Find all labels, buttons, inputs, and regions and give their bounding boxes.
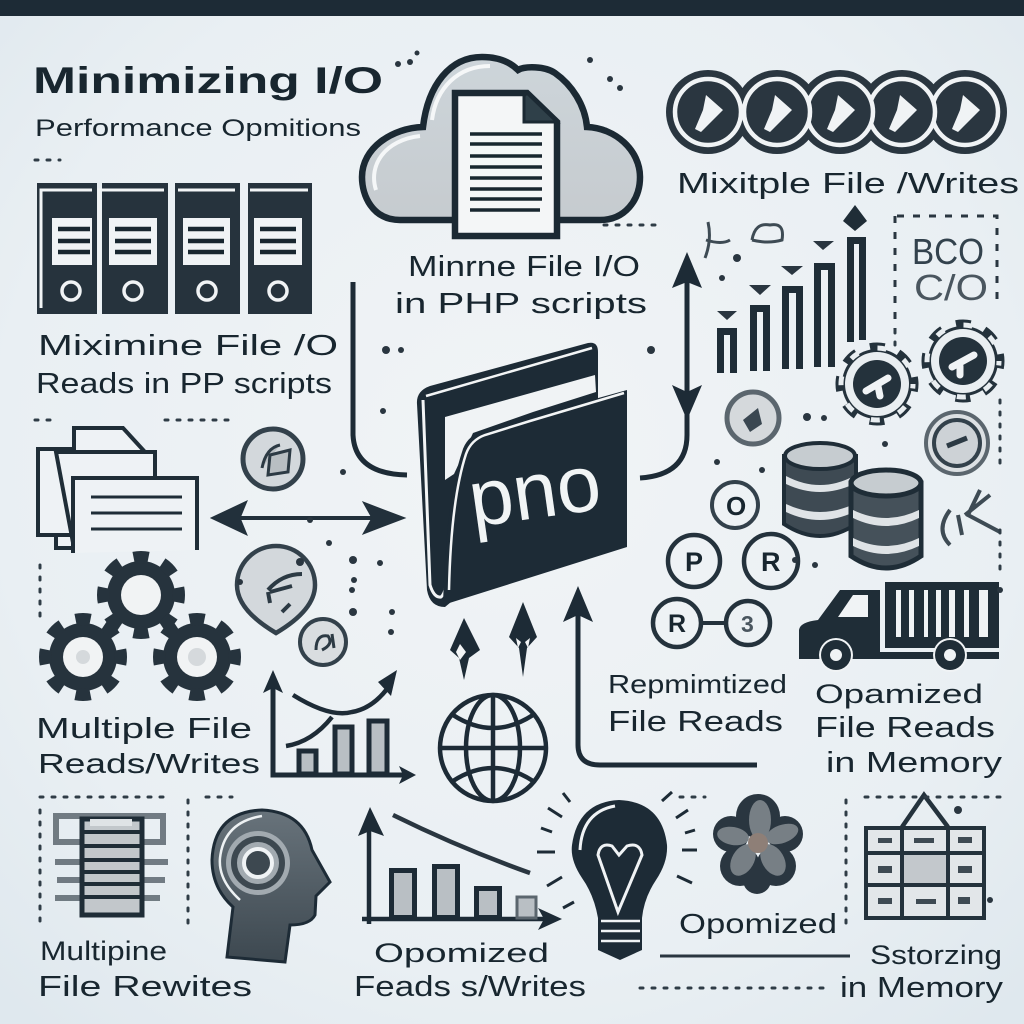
label: minimize file io <box>395 251 647 320</box>
diagram: P R nodes <box>653 534 798 647</box>
label: multiple file reads writes: Multiple File <box>36 713 252 745</box>
label: repmitized file reads: File Reads <box>608 706 783 738</box>
label: multiple file reads writes <box>36 713 260 779</box>
label: optimized reads writes: Opomized <box>374 938 549 968</box>
chart: descending bars <box>358 807 562 930</box>
label: multiple file writes: Mixitple File /Writes <box>677 168 1019 200</box>
icon: squiggle badge <box>942 490 1000 545</box>
chart: mini bars with trend <box>263 670 416 784</box>
icon: small round badge top <box>243 429 303 489</box>
icon: globe <box>440 695 546 801</box>
icon: cloud with document <box>362 57 640 236</box>
icon: flower badge <box>713 794 803 894</box>
icon: database cylinders <box>784 443 921 568</box>
label: reads in php scripts: Miximine File /O <box>38 330 338 362</box>
icon: head with target <box>212 810 330 962</box>
icon: memory grid <box>866 795 984 918</box>
icon: row of play circles <box>666 70 1007 154</box>
text: code fragment <box>895 216 997 330</box>
label: multipine file rewrites <box>38 936 252 1003</box>
icon: small badges right <box>712 392 988 528</box>
text: code fragment: C/O <box>914 267 988 308</box>
label: optimized reads writes <box>354 938 586 1003</box>
label: optimized file reads in memory: Opamized <box>815 679 983 709</box>
label: repmitized file reads: Repmimtized <box>608 669 787 699</box>
label: repmitized file reads <box>608 669 787 738</box>
diagram: P R nodes: R <box>761 547 780 577</box>
icon: light bulb <box>537 792 697 960</box>
label: reads in php scripts: Reads in PP scripts <box>36 368 332 400</box>
label: optimized: Opomized <box>679 908 837 939</box>
diagram: P R nodes: P <box>685 547 703 577</box>
icon: folder PHP <box>417 343 627 607</box>
arrow: vertical double <box>640 252 702 478</box>
label: minimize file io: Minrne File I/O <box>408 251 640 283</box>
label: minimize file io: in PHP scripts <box>395 288 647 320</box>
icon: truck <box>799 582 999 672</box>
diagram: P R nodes: R <box>668 610 686 638</box>
arrow: horizontal double <box>211 501 405 535</box>
label: multipine file rewrites: Multipine <box>40 936 167 966</box>
icon: gears right <box>840 324 1000 421</box>
label: optimized file reads in memory: in Memory <box>826 747 1003 779</box>
icon: folder PHP: pno <box>463 437 606 544</box>
label: optimized file reads in memory: File Reads <box>815 712 995 744</box>
label: reads in php scripts <box>36 330 338 400</box>
arrow: left connector to folder <box>353 282 407 475</box>
icon: three gears <box>45 557 235 695</box>
label: storing in memory <box>840 940 1004 1004</box>
title: Minimizing I/O <box>33 60 383 101</box>
label: optimized reads writes: Feads s/Writes <box>354 971 586 1003</box>
arrows: small up-down pair <box>450 602 537 680</box>
label: storing in memory: Sstorzing <box>870 940 1002 970</box>
arrow: up to folder <box>563 586 757 765</box>
diagram: P R nodes: 3 <box>741 611 754 637</box>
label: storing in memory: in Memory <box>840 972 1004 1004</box>
label: optimized file reads in memory <box>815 679 1003 779</box>
icon: small badges right: O <box>726 491 746 521</box>
icon: magnifier badge <box>237 546 346 665</box>
icon: server racks <box>37 183 312 314</box>
subtitle: Performance Opmitions <box>35 115 361 142</box>
label: multipine file rewrites: File Rewites <box>38 971 252 1003</box>
bar chart with arrow <box>717 205 867 373</box>
icon: stacked documents <box>38 428 197 553</box>
label: multiple file reads writes: Reads/Writes <box>38 748 260 779</box>
text: code fragment: BCO <box>912 231 984 272</box>
icon: file stack bottom left <box>55 816 168 915</box>
